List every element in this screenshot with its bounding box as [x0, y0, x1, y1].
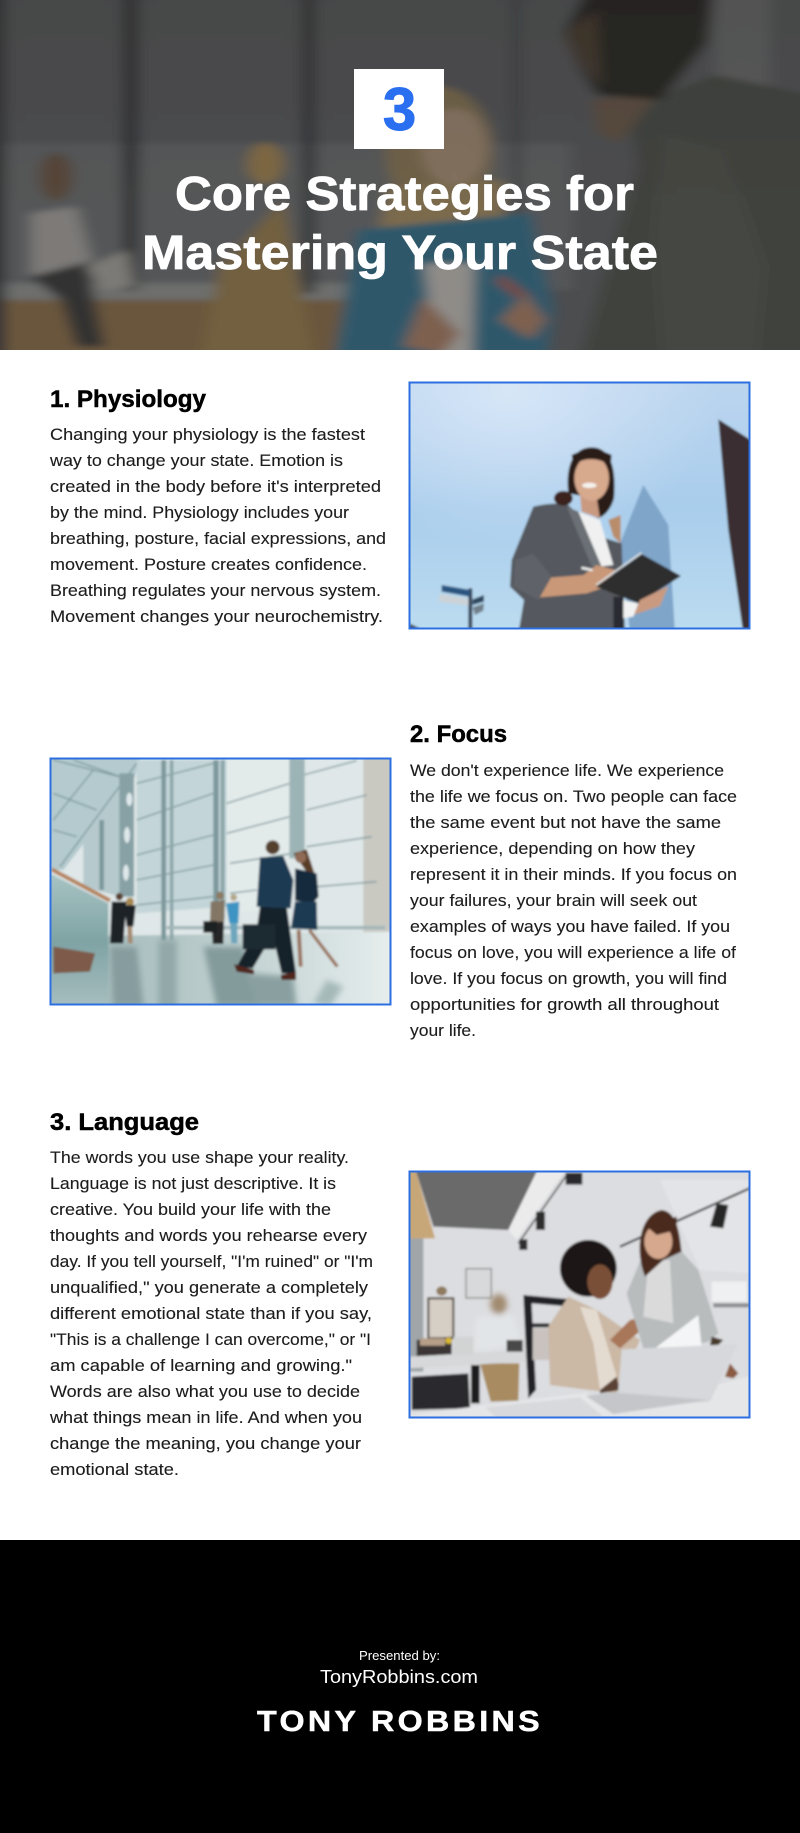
text block: language: am capable of learning and growing." [50, 1356, 352, 1375]
text block: language: Language is not just descriptive. It is [50, 1174, 336, 1193]
text block: focus: examples of ways you have failed. If you [410, 917, 730, 936]
panel: focus [43, 721, 737, 1040]
text block: language: creative. You build your life with the [50, 1200, 331, 1219]
heading: language: 3. Language [50, 1109, 199, 1136]
text block: language [49, 1148, 373, 1479]
text block: language: The words you use shape your reality. [50, 1148, 349, 1167]
text block: focus: your failures, your brain will seek out [410, 891, 697, 910]
heading: focus: 2. Focus [410, 721, 507, 748]
hero background photo [0, 0, 800, 373]
number badge: 3 [383, 76, 416, 143]
text block: focus [410, 761, 737, 1040]
text block: language: change the meaning, you change your [50, 1434, 361, 1453]
text block: physiology [49, 425, 386, 626]
text block: language: "This is a challenge I can overcome," or "I [50, 1330, 371, 1349]
text block: physiology: breathing, posture, facial expressions, and [50, 529, 386, 548]
text block: language: unqualified," you generate a completely [50, 1278, 369, 1297]
text block: focus: the same event but not have the same [410, 813, 721, 832]
presented by label: Presented by: [359, 1648, 440, 1663]
text block: focus: opportunities for growth all throughout [410, 995, 719, 1014]
text block: physiology: Movement changes your neurochemistry. [50, 607, 383, 626]
text block: focus: focus on love, you will experience a life of [410, 943, 736, 962]
photo: businesswoman with tablet [403, 377, 757, 637]
text block: focus: We don't experience life. We experience [410, 761, 724, 780]
number badge [354, 69, 444, 149]
website: TonyRobbins.com [320, 1667, 478, 1687]
text block: physiology: Changing your physiology is the fastest [50, 425, 365, 444]
photo: glass hall with business people [43, 753, 397, 1010]
panel: physiology [49, 377, 757, 637]
text block: physiology: way to change your state. Emotion is [49, 451, 343, 470]
title: Core Strategies for [175, 168, 634, 221]
heading: physiology: 1. Physiology [50, 386, 207, 413]
text block: language: emotional state. [50, 1460, 179, 1479]
text block: physiology: Breathing regulates your nervous system. [50, 581, 381, 600]
panel: hero header [0, 0, 800, 373]
text block: physiology: created in the body before it's interpreted [50, 477, 381, 496]
text block: language: thoughts and words you rehearse every [50, 1226, 368, 1245]
text block: physiology: by the mind. Physiology includes your [50, 503, 349, 522]
title [142, 168, 658, 280]
text block: language: different emotional state than if you say, [50, 1304, 372, 1323]
logo wordmark: TONY ROBBINS [257, 1706, 543, 1738]
text block: focus: your life. [410, 1021, 476, 1040]
panel: footer [0, 1540, 800, 1833]
text block: focus: represent it in their minds. If you focus on [410, 865, 737, 884]
text block: language: day. If you tell yourself, "I'm ruined" or "I'm [50, 1252, 373, 1271]
text block: focus: experience, depending on how they [410, 839, 696, 858]
text block: language: Words are also what you use to decide [50, 1382, 360, 1401]
text block: physiology: movement. Posture creates confidence. [50, 555, 367, 574]
text block: language: what things mean in life. And when you [49, 1408, 362, 1427]
title: Mastering Your State [142, 227, 658, 280]
panel: language [49, 1109, 757, 1479]
photo: office colleagues at laptop [403, 1165, 757, 1425]
text block: focus: the life we focus on. Two people can face [410, 787, 737, 806]
text block: focus: love. If you focus on growth, you will find [410, 969, 727, 988]
